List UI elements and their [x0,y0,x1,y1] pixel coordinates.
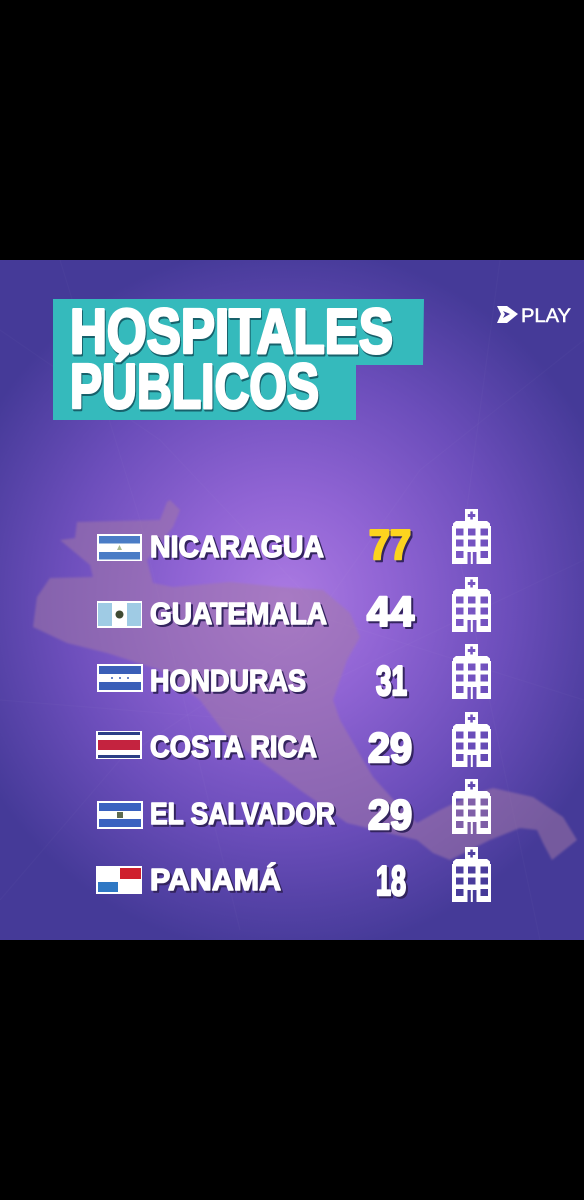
bottom black band [0,940,584,1200]
flag: Honduras [97,664,143,692]
icon: hospital [452,644,491,699]
row: El Salvador [97,779,491,838]
flag: Guatemala [97,601,142,628]
country name: NICARAGUA [150,529,324,564]
row: Costa Rica [96,712,491,771]
teal title banner [53,299,424,420]
country name: EL SALVADOR [150,796,335,831]
value: 77: 77 [369,521,411,568]
title block [53,297,424,422]
icon: hospital [452,712,491,767]
row: Panamá [96,847,491,904]
logo: D PLAY [497,306,571,327]
logo wordmark: PLAY [521,306,571,327]
top black band [0,0,584,260]
flag: El Salvador [97,801,143,829]
title line 2: PÚBLICOS [70,352,319,422]
row: Guatemala [97,577,491,635]
purple background panel [0,260,584,940]
flag: Costa Rica [96,731,142,759]
icon: hospital [452,577,491,632]
title line 1: HOSPITALES [70,297,393,367]
value: 44: 44 [367,588,415,635]
country name: COSTA RICA [150,729,317,764]
map of Central America silhouette [33,500,577,860]
flag: Panamá [96,866,142,894]
value: 29: 29 [368,791,412,838]
icon: hospital [452,847,491,902]
country name: PANAMÁ [150,862,281,897]
value: 29: 29 [368,724,412,771]
flag: Nicaragua [97,534,142,561]
country name: GUATEMALA [150,596,327,631]
value: 18: 18 [376,857,406,904]
row: Nicaragua [97,509,491,568]
icon: hospital [452,779,491,834]
row: Honduras [97,644,491,704]
logo icon [497,306,518,323]
country name: HONDURAS [150,663,306,698]
icon: hospital [452,509,491,564]
value: 31: 31 [376,657,407,704]
